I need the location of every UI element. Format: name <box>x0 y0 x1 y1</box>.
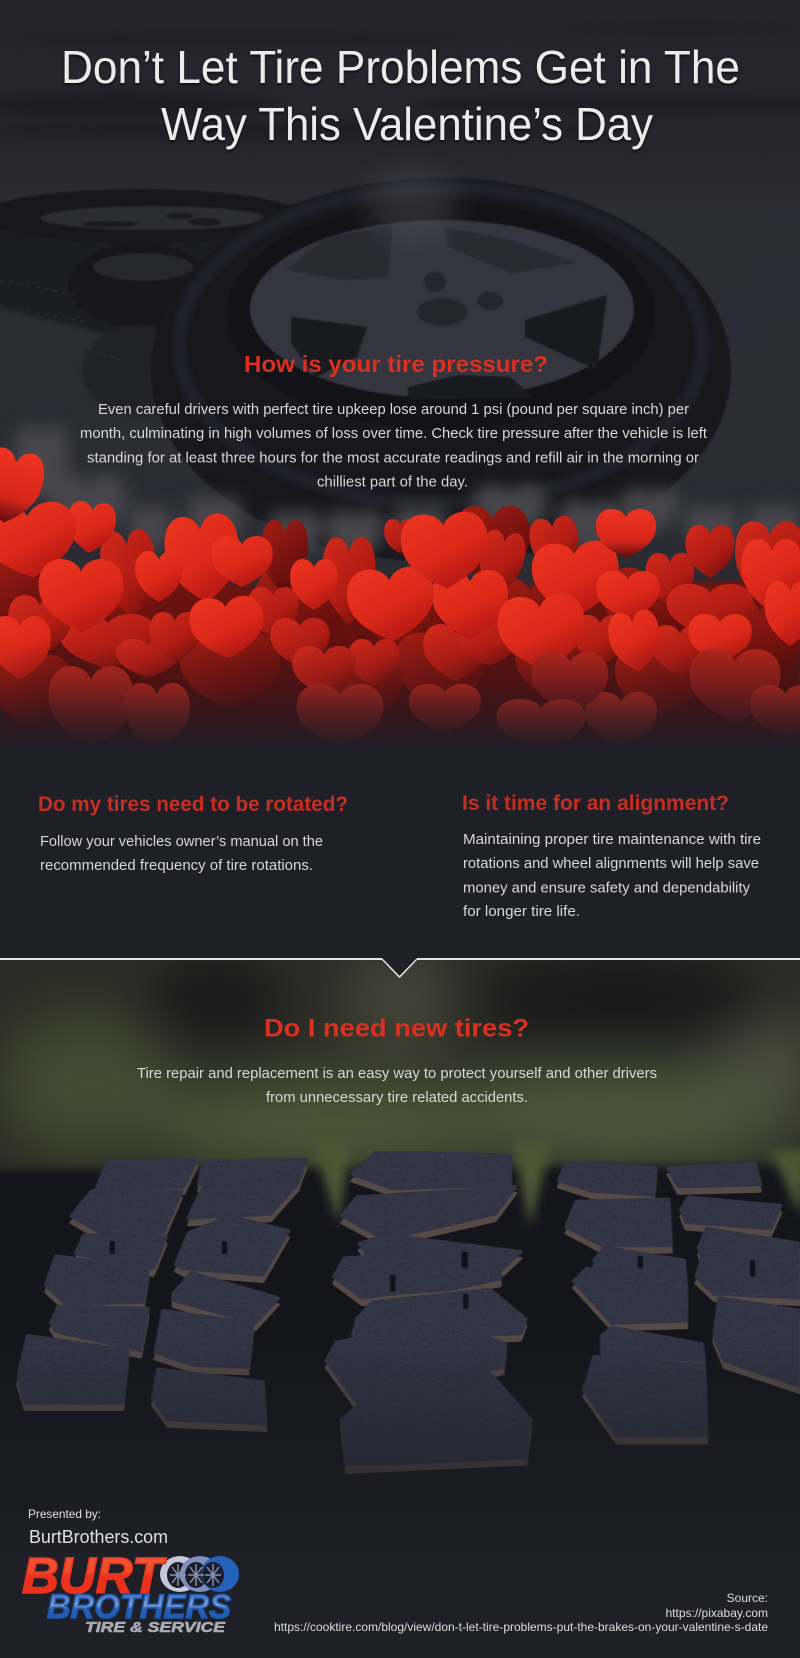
ghost hearts haze <box>16 424 800 561</box>
text: tire pressure body: Even careful drivers with perfect tire upkeep lose around 1 psi (pound per square inch) per <box>98 401 689 418</box>
heading: rotation: Do my tires need to be rotated? <box>38 793 348 816</box>
divider line with notch <box>0 957 800 977</box>
logo tires <box>160 1556 239 1592</box>
hearts field <box>0 444 800 752</box>
logo tagline: TIRE & SERVICE <box>85 1619 226 1636</box>
text: rotation body: Follow your vehicles owner’s manual on the <box>40 833 323 850</box>
panel: alignment <box>462 792 761 920</box>
text: tire pressure body: month, culminating in high volumes of loss over time. Check tire pressure after the vehicle is left <box>80 425 708 442</box>
text: alignment body: Maintaining proper tire maintenance with tire <box>463 831 761 848</box>
presented by: BurtBrothers.com <box>29 1527 168 1547</box>
presented by: Presented by: <box>28 1507 101 1521</box>
text: alignment body: rotations and wheel alignments will help save <box>463 855 759 872</box>
source credits: Source: <box>727 1591 768 1605</box>
source credits: https://pixabay.com <box>666 1606 768 1620</box>
panel: rotation <box>38 793 348 874</box>
text: new tires body: from unnecessary tire related accidents. <box>266 1089 528 1106</box>
text: rotation body: recommended frequency of tire rotations. <box>40 857 313 874</box>
title: Way This Valentine’s Day <box>161 98 653 150</box>
photo: road background <box>0 161 800 586</box>
photo: tire tread <box>0 1144 800 1474</box>
text: tire pressure body <box>80 401 708 490</box>
heart: floating top left <box>0 447 44 523</box>
heading: new tires: Do I need new tires? <box>264 1014 529 1042</box>
photo: stacked tires behind <box>0 189 300 415</box>
heading: alignment: Is it time for an alignment? <box>462 792 729 815</box>
heart: floating right <box>596 509 656 558</box>
text: tire pressure body: chilliest part of the day. <box>317 474 468 490</box>
photo: main tire with rim <box>151 169 731 562</box>
source credits: https://cooktire.com/blog/view/don-t-let-tire-problems-put-the-brakes-on-your-valentine-s-date <box>274 1620 768 1634</box>
hearts fade into dark band <box>0 640 800 752</box>
text: alignment body <box>463 831 761 920</box>
text: new tires body <box>137 1065 657 1106</box>
text: new tires body: Tire repair and replacement is an easy way to protect yourself and other drivers <box>137 1065 657 1082</box>
logo word BROTHERS: BROTHERS <box>47 1588 231 1626</box>
source credits <box>274 1591 768 1634</box>
logo: Burt Brothers <box>22 1547 239 1636</box>
text: rotation body <box>40 833 323 874</box>
photo: blurred foliage <box>0 960 800 1172</box>
text: alignment body: for longer tire life. <box>463 903 580 920</box>
presented by <box>28 1507 168 1547</box>
logo word BURT: BURT <box>22 1547 167 1604</box>
text: alignment body: money and ensure safety and dependability <box>463 880 750 896</box>
title <box>61 41 740 150</box>
heading: tire pressure: How is your tire pressure? <box>244 351 548 377</box>
text: tire pressure body: standing for at least three hours for the most accurate readings and refill air in the morning or <box>87 450 699 466</box>
green gaps between tread ribs <box>312 1140 800 1228</box>
title: Don’t Let Tire Problems Get in The <box>61 41 740 93</box>
